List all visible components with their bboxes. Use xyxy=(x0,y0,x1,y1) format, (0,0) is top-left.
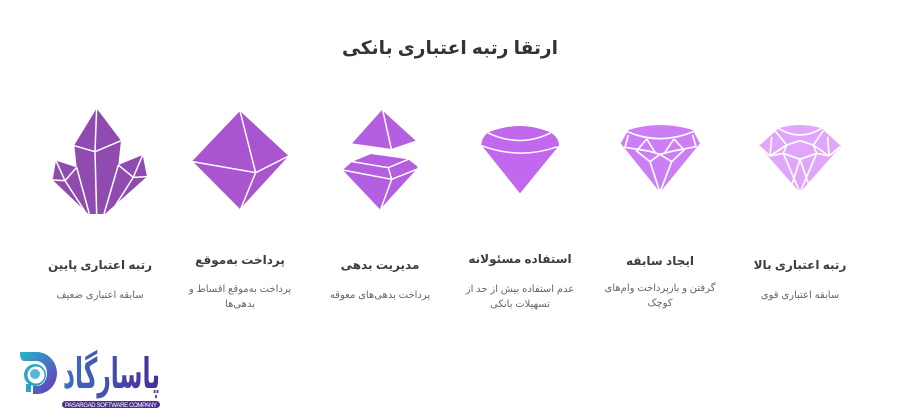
description: سابقه اعتباری قوی xyxy=(761,290,839,301)
description: پرداخت به‌موقع اقساط و بدهی‌ها xyxy=(189,284,291,310)
icon: faceted gem xyxy=(621,125,700,192)
description: سابقه اعتباری ضعیف xyxy=(56,290,144,301)
description: پرداخت بدهی‌های معوقه xyxy=(330,290,430,301)
icon: rough crystal cluster xyxy=(53,108,147,214)
heading: استفاده مسئولانه xyxy=(468,252,572,266)
heading: مدیریت بدهی xyxy=(341,258,419,272)
stage: high credit score xyxy=(754,258,846,301)
stage: debt management xyxy=(330,258,430,301)
icon: brilliant gem xyxy=(759,125,841,193)
heading: رتبه اعتباری پایین xyxy=(48,258,152,272)
title: ارتقا رتبه اعتباری بانکی xyxy=(342,37,558,58)
icon: split gem xyxy=(343,110,418,209)
icon: smooth cut gem xyxy=(481,126,559,193)
description: گرفتن و بازپرداخت وام‌های کوچک xyxy=(604,283,716,309)
heading: ایجاد سابقه xyxy=(626,254,694,268)
icon: octahedron gem xyxy=(192,111,289,209)
stage: low credit score xyxy=(48,258,152,301)
stage: on-time payment xyxy=(188,253,291,310)
logo xyxy=(20,349,160,409)
heading: پرداخت به‌موقع xyxy=(195,253,285,267)
stage: responsible use xyxy=(465,252,574,310)
heading: رتبه اعتباری بالا xyxy=(754,258,846,272)
logo tagline: PASARGAD SOFTWARE COMPANY xyxy=(65,403,157,409)
icon: logo mark xyxy=(20,352,57,394)
logo wordmark: پاسارگاد xyxy=(63,349,160,399)
stage: building history xyxy=(604,254,716,309)
description: عدم استفاده بیش از حد از تسهیلات بانکی xyxy=(466,284,574,310)
